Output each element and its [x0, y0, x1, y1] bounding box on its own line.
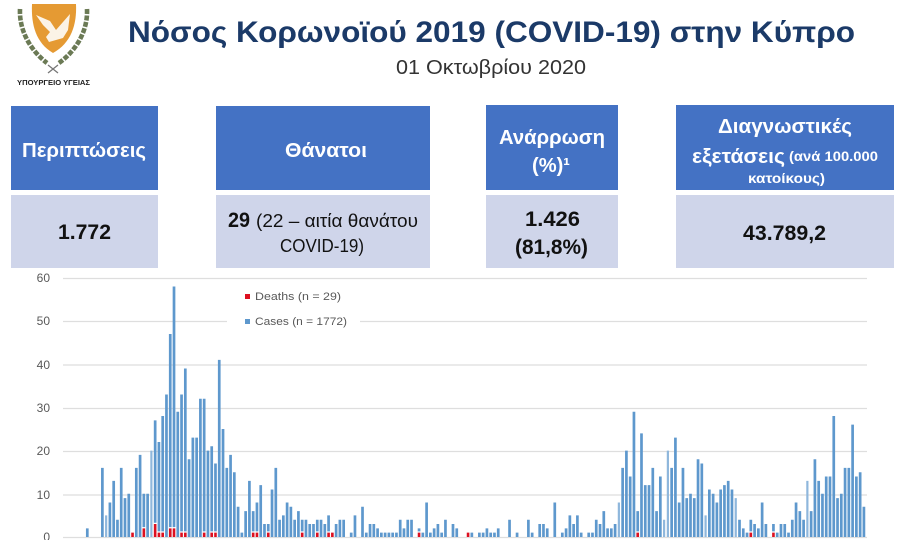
panel: deaths: Θάνατοι — [285, 140, 367, 162]
panel: recovery: (%)¹ — [532, 155, 570, 177]
legend: Cases (n = 1772) — [255, 316, 347, 328]
icon: dove — [36, 14, 70, 42]
legend: Deaths (n = 29) — [255, 291, 341, 303]
panel: diagnostic tests: (ανά 100.000 — [789, 148, 878, 164]
subtitle: date: 01 Οκτωβρίου 2020 — [396, 57, 586, 79]
panel: deaths — [216, 106, 430, 268]
y axis labels — [37, 271, 50, 540]
panel: deaths: COVID-19) — [280, 236, 364, 256]
case bars — [87, 286, 864, 537]
y axis labels: 40 — [37, 358, 50, 372]
y axis labels: 30 — [37, 401, 50, 415]
ministry label: ΥΠΟΥΡΓΕΙΟ ΥΓΕΙΑΣ — [17, 78, 91, 87]
panel: recovery — [486, 105, 618, 268]
y axis labels: 20 — [37, 444, 50, 458]
panel: deaths: 29 — [228, 209, 250, 232]
panel: cases: 1.772 — [58, 221, 111, 244]
emblem: Cyprus Ministry of Health logo — [17, 4, 91, 87]
panel: diagnostic tests: Διαγνωστικές — [718, 116, 852, 138]
panel: diagnostic tests: εξετάσεις — [692, 146, 785, 168]
y axis labels: 10 — [37, 488, 50, 502]
y axis labels: 60 — [37, 271, 50, 285]
panel: diagnostic tests — [676, 105, 894, 268]
title: Νόσος Κορωνοϊού 2019 (COVID-19) στην Κύπρο — [128, 16, 855, 49]
legend — [245, 291, 347, 328]
y axis labels: 50 — [37, 314, 50, 328]
death bars — [133, 523, 773, 537]
panel: recovery: (81,8%) — [515, 236, 588, 259]
panel: cases — [11, 106, 158, 268]
panel: recovery: 1.426 — [525, 208, 580, 231]
icon: olive wreath — [20, 9, 87, 73]
panel: recovery: Ανάρρωση — [499, 127, 605, 149]
icon: orange shield — [32, 4, 76, 53]
panel: diagnostic tests: 43.789,2 — [743, 222, 826, 245]
bar chart: daily cases and deaths — [37, 271, 867, 540]
panel: diagnostic tests: κατοίκους) — [748, 170, 825, 186]
panel: cases: Περιπτώσεις — [22, 140, 146, 162]
panel: deaths: (22 – αιτία θανάτου — [256, 211, 418, 231]
